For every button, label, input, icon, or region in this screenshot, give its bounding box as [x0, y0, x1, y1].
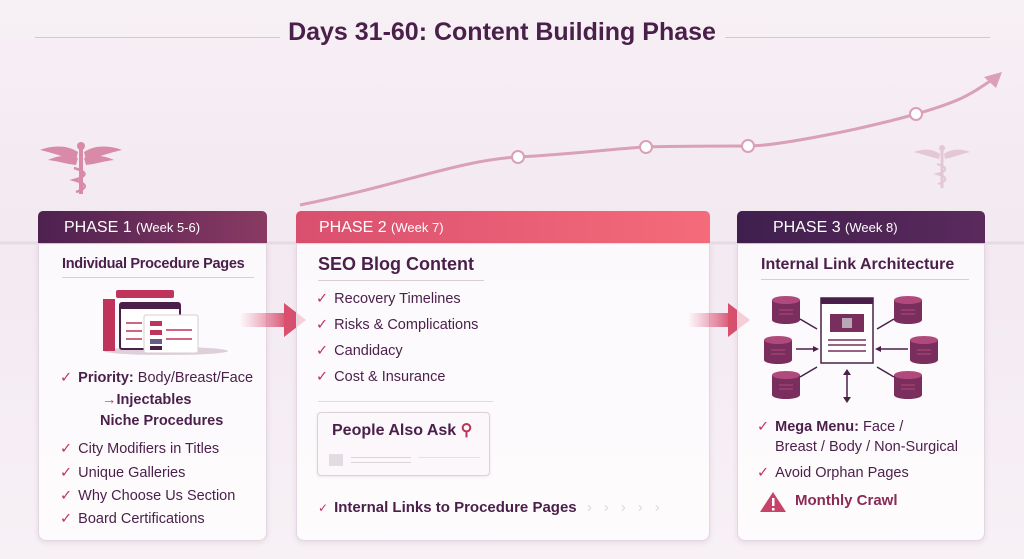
heading: internal link architecture: Internal Link Architecture	[761, 256, 954, 273]
icon: caduceus right	[914, 145, 970, 188]
callout: monthly crawl warning	[760, 492, 898, 512]
title: Days 31-60: Content Building Phase	[288, 18, 716, 46]
icon: caduceus left	[40, 142, 122, 194]
arrow: phase2 to phase3	[690, 303, 750, 337]
list: phase 2 bullets: ✓ Risks & Complications	[316, 317, 478, 333]
list: phase 3 bullets	[757, 419, 958, 481]
icon: stacked web pages	[103, 290, 228, 355]
list: phase 1 bullets: Niche Procedures	[100, 413, 223, 429]
list: phase 3 bullets: ✓ Mega Menu: Face /	[757, 419, 903, 435]
arrow: phase1 to phase2	[243, 303, 306, 337]
phase 1 header	[38, 211, 267, 244]
list: phase 1 bullets: →Injectables	[102, 392, 191, 408]
heading: individual procedure pages: Individual Procedure Pages	[62, 256, 244, 272]
heading: SEO blog content: SEO Blog Content	[318, 254, 474, 274]
callout: people also ask	[317, 412, 490, 476]
diagram: link hub	[764, 296, 938, 403]
list: phase 2 bullets: ✓ Recovery Timelines	[316, 291, 461, 307]
list: phase 1 bullets: ✓ City Modifiers in Titles	[60, 441, 219, 457]
heading: SEO blog content	[318, 254, 484, 281]
list: phase 3 bullets: Breast / Body / Non-Surgical	[775, 439, 958, 455]
phase 2 header	[296, 211, 710, 244]
list: phase 1 bullets: ✓ Board Certifications	[60, 511, 205, 527]
phase 1 header: PHASE 1 (Week 5-6)	[64, 219, 200, 236]
list: phase 1 bullets	[60, 370, 253, 527]
list: phase 2 bullets: ✓ Cost & Insurance	[316, 369, 445, 385]
list: phase 3 bullets: ✓ Avoid Orphan Pages	[757, 465, 909, 481]
list: phase 2 bullets: ✓ Candidacy	[316, 343, 403, 359]
heading: individual procedure pages	[62, 256, 254, 278]
text: internal links: ✓ Internal Links to Procedure Pages ›››››	[318, 499, 672, 516]
callout: monthly crawl warning: Monthly Crawl	[795, 492, 898, 509]
list: phase 1 bullets: ✓ Priority: Body/Breast/Face	[60, 370, 253, 386]
heading: internal link architecture	[761, 256, 969, 280]
phase 2 header: PHASE 2 (Week 7)	[319, 219, 444, 236]
list: phase 1 bullets: ✓ Why Choose Us Section	[60, 488, 235, 504]
list: phase 1 bullets: ✓ Unique Galleries	[60, 465, 185, 481]
callout: people also ask: People Also Ask ⚲	[332, 422, 472, 439]
phase 3 header	[737, 211, 985, 244]
phase 3 header: PHASE 3 (Week 8)	[773, 219, 898, 236]
list: phase 2 bullets	[316, 291, 478, 385]
